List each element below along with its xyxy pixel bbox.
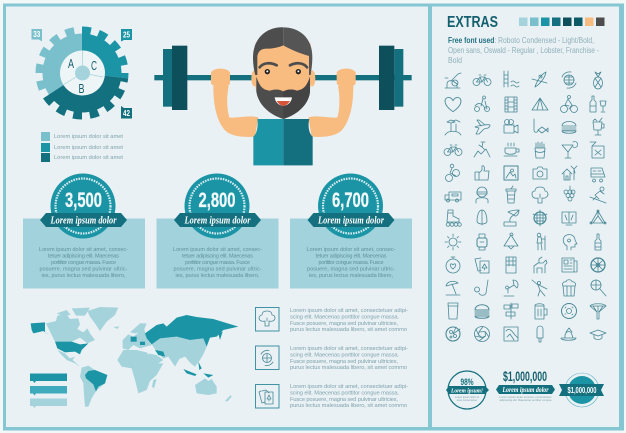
text block: Lorem ipsum dolor sit amet, consectetuer adipi- bbox=[290, 308, 408, 314]
icon: picture bbox=[504, 166, 518, 180]
text block bbox=[290, 308, 408, 333]
stat card 3 bbox=[290, 174, 412, 288]
card background bbox=[290, 218, 412, 288]
gear letters: A bbox=[68, 56, 74, 71]
card background bbox=[23, 218, 145, 288]
icon: thumbs up bbox=[475, 166, 489, 180]
world map bbox=[31, 307, 238, 407]
body text: porttitor congue massa. Fusce bbox=[318, 260, 384, 266]
icon: pizza bbox=[446, 327, 460, 341]
icon: burger bbox=[475, 305, 489, 318]
callout 25 bbox=[121, 29, 132, 42]
icon: globe bbox=[256, 346, 279, 370]
icon: donut bbox=[562, 304, 576, 318]
body text: porttitor congue massa. Fusce bbox=[185, 260, 250, 266]
icon: playing cards bbox=[256, 384, 279, 408]
icon: tree bbox=[532, 187, 548, 203]
body text: Lorem ipsum dolor sit amet, consec- bbox=[39, 247, 128, 253]
bottom badge: 98%: 98% bbox=[460, 377, 474, 388]
icon: fishing bbox=[534, 119, 548, 133]
text block: Lorem ipsum dolor sit amet, consectetuer adipi- bbox=[290, 346, 408, 352]
bottom badge: $1,000,000 seal: $1,000,000 bbox=[568, 386, 597, 395]
weightlifter illustration bbox=[154, 27, 412, 165]
icon: tree bbox=[256, 308, 279, 331]
icon: mountain climber bbox=[474, 142, 490, 157]
hair bbox=[253, 27, 283, 75]
icon: film strip bbox=[505, 97, 517, 112]
icon: person with goggles bbox=[476, 187, 488, 203]
icon: desert island bbox=[445, 120, 461, 135]
font credits: Free font used: Roboto Condensed - Light/Bold, bbox=[448, 36, 594, 45]
callout 33 bbox=[32, 29, 42, 42]
icon: martini bbox=[562, 142, 578, 158]
callout 42 bbox=[121, 106, 132, 118]
bottom badge: $1,000,000 ribbon: Lorem ipsum dolor bbox=[502, 386, 549, 394]
icon: tropical drink bbox=[593, 118, 604, 135]
body text bbox=[39, 247, 128, 279]
icon: gramophone bbox=[504, 210, 519, 226]
gear legend: Lorem ipsum dolor sit amet bbox=[54, 145, 123, 151]
card background bbox=[156, 218, 278, 288]
icon: coffee cup bbox=[504, 143, 519, 156]
ribbon: Lorem ipsum dolor bbox=[50, 216, 117, 226]
icon: head profile bbox=[563, 235, 577, 250]
icon: playing cards bbox=[475, 258, 489, 273]
icon: photo bbox=[504, 327, 518, 341]
icon: caravan truck bbox=[445, 192, 461, 202]
bottom badge: 98%: Lorem ipsum! bbox=[450, 388, 483, 394]
icon: bicycle bbox=[444, 145, 462, 156]
body text: ies, purus lectus malesuada libero, bbox=[176, 273, 260, 279]
map legend bbox=[30, 374, 67, 408]
medal bbox=[184, 174, 250, 238]
body text: porttitor congue massa. Fusce bbox=[51, 260, 116, 266]
bottom badge: $1,000,000 ribbon bbox=[496, 368, 555, 402]
icon: kayak bbox=[532, 72, 547, 87]
icon: pineapple bbox=[594, 72, 602, 89]
arms and hands bbox=[211, 69, 356, 137]
icon: globe with arrows bbox=[562, 72, 576, 88]
eyebrows and eyes bbox=[260, 63, 307, 67]
text block: purus lectus malesuada libero, sit amet commo bbox=[290, 327, 407, 333]
text block bbox=[290, 384, 408, 409]
icon: parasol bbox=[590, 304, 606, 319]
feature row 2 bbox=[256, 346, 408, 371]
callout 25: 25 bbox=[123, 30, 130, 40]
light regions bbox=[46, 307, 232, 407]
font credits bbox=[448, 36, 599, 65]
font credits: Bold bbox=[448, 56, 462, 65]
icon: bottle bbox=[595, 234, 601, 250]
body text: tetuer adipiscing elit. Maecenas bbox=[316, 254, 387, 260]
text block: scing elit. Maecenas porttitor congue massa. bbox=[290, 314, 399, 320]
icon: bicycle bbox=[473, 75, 491, 86]
bottom badge: 98% bbox=[446, 371, 489, 409]
body text: Lorem ipsum dolor sit amet, consec- bbox=[306, 247, 396, 253]
medal bbox=[50, 174, 116, 238]
gear segment A bbox=[36, 27, 82, 98]
callout 42: 42 bbox=[123, 109, 130, 118]
icon: roller skate bbox=[446, 210, 461, 226]
body text bbox=[173, 247, 262, 279]
bottom badge: $1,000,000 seal bbox=[559, 373, 604, 407]
icon: cyclist bbox=[560, 96, 578, 112]
number: 3,500 bbox=[65, 188, 102, 212]
body text: posuere, magna sed pulvinar ultric- bbox=[174, 266, 262, 272]
icon: network globe bbox=[533, 210, 547, 226]
icon: beach umbrella bbox=[446, 281, 460, 295]
icon: camera bbox=[533, 167, 547, 179]
body text: tetuer adipiscing elit. Maecenas bbox=[48, 254, 119, 260]
icon: juicer bbox=[561, 328, 576, 340]
icon: kite surfer bbox=[504, 280, 518, 296]
body text: posuere, magna sed pulvinar ultric- bbox=[307, 266, 395, 272]
gear hub bbox=[60, 50, 105, 96]
icon: camcorder bbox=[504, 120, 518, 133]
gear letters: B bbox=[78, 81, 84, 96]
gear pie chart bbox=[40, 30, 124, 116]
icon: graduation cap bbox=[590, 330, 606, 340]
icon: tent bbox=[532, 98, 548, 110]
highlighted countries bbox=[31, 315, 238, 392]
icon: skier bbox=[590, 187, 606, 203]
icon: wheel bbox=[591, 258, 605, 272]
icon: french fries bbox=[535, 142, 545, 158]
number: 6,700 bbox=[332, 188, 369, 212]
icon: horse rider bbox=[534, 257, 547, 273]
colour swatches bbox=[519, 18, 604, 26]
bottom badge: 98%: Lorem ipsum dolor sit bbox=[455, 396, 479, 399]
icon: tall glass bbox=[448, 303, 458, 319]
icon: swimming pool bbox=[504, 71, 519, 87]
text block: Fusce posuere, magna sed pulvinar ultricies, bbox=[290, 359, 398, 365]
text block bbox=[290, 346, 408, 371]
icon: triangle network bbox=[590, 210, 606, 224]
text block: purus lectus malesuada libero, sit amet commo bbox=[290, 403, 407, 409]
beard bbox=[256, 77, 310, 119]
text block: purus lectus malesuada libero, sit amet commo bbox=[290, 365, 407, 371]
icon: camera aperture bbox=[474, 326, 490, 342]
icon: beer mug bbox=[535, 304, 547, 319]
text block: scing elit. Maecenas porttitor congue massa. bbox=[290, 390, 399, 396]
tank top bbox=[253, 119, 283, 165]
icon: cycling figure bbox=[446, 164, 460, 182]
icon: popcorn bbox=[562, 280, 576, 296]
body text: Lorem ipsum dolor sit amet, consec- bbox=[173, 247, 262, 253]
barbell bbox=[154, 46, 412, 110]
icon: burger bbox=[562, 122, 576, 133]
medal bbox=[318, 174, 383, 238]
icon: smart watch bbox=[477, 234, 487, 250]
font credits: Open sans, Oswald - Regular , Lobster, Franchise - bbox=[448, 46, 599, 55]
icon: takeaway cup bbox=[506, 186, 516, 203]
feature row 1 bbox=[256, 308, 408, 333]
bottom badge: $1,000,000 ribbon: adipiscing elit. Maecenas porttitor congue bbox=[500, 398, 552, 402]
stat card 2 bbox=[156, 174, 278, 288]
callout 33: 33 bbox=[33, 30, 41, 39]
icon: open book bbox=[562, 212, 576, 225]
right panel bbox=[432, 6, 619, 427]
icon: stopwatch with heart bbox=[446, 257, 460, 273]
bottom badge: $1,000,000 ribbon: Lorem ipsum dolor sit amet, consectetuer bbox=[500, 395, 552, 399]
bottom badge: $1,000,000 ribbon: $1,000,000 bbox=[503, 368, 547, 384]
icon: camper van bbox=[591, 168, 605, 182]
gear segment B bbox=[43, 76, 128, 120]
gear letters bbox=[68, 56, 97, 96]
icon: heart bbox=[445, 97, 461, 112]
icon: jerrycan bbox=[590, 142, 604, 158]
feature row 3 bbox=[256, 384, 408, 409]
icon: sun bbox=[445, 234, 461, 250]
icon: avocado bbox=[477, 210, 487, 225]
icon: newspaper bbox=[562, 258, 577, 272]
body text: ies, purus lectus malesuada libero, bbox=[42, 273, 126, 279]
ribbon: Lorem ipsum dolor bbox=[184, 216, 251, 226]
gear letters: C bbox=[91, 58, 97, 73]
extras heading: EXTRAS bbox=[447, 14, 498, 31]
icon: bottle and glass bbox=[590, 96, 606, 112]
number: 2,800 bbox=[198, 188, 236, 212]
gear segment C bbox=[82, 26, 128, 78]
icon: chocolate bar bbox=[506, 257, 516, 273]
icon: popsicle bbox=[537, 326, 543, 342]
gear legend bbox=[41, 132, 123, 162]
icon: grapes bbox=[564, 186, 575, 201]
text block: Fusce posuere, magna sed pulvinar ultricies, bbox=[290, 397, 398, 403]
icon: golf club bbox=[475, 280, 488, 295]
gear legend: Lorem ipsum dolor sit amet bbox=[54, 134, 123, 140]
icon: tennis racket bbox=[591, 280, 606, 296]
text block: scing elit. Maecenas porttitor congue massa. bbox=[290, 352, 399, 358]
icon: scooter rider bbox=[474, 96, 490, 112]
text block: Fusce posuere, magna sed pulvinar ultricies, bbox=[290, 321, 398, 327]
icon: airplane bbox=[475, 120, 490, 134]
body text: ies, purus lectus malesuada libero, bbox=[309, 273, 393, 279]
icon: hiker bbox=[537, 233, 545, 250]
icon: signpost bbox=[504, 303, 518, 319]
gear legend: Lorem ipsum dolor sit amet bbox=[54, 155, 123, 161]
icon: dancer bbox=[532, 280, 547, 296]
ears bbox=[251, 70, 257, 86]
icon grid bbox=[444, 71, 606, 342]
body text bbox=[306, 247, 396, 279]
text block: Lorem ipsum dolor sit amet, consectetuer adipi- bbox=[290, 384, 408, 390]
stat card 1 bbox=[23, 174, 145, 288]
icon: exercise bike bbox=[445, 73, 461, 88]
bottom badge: 98%: amet consectetuer bbox=[457, 399, 477, 402]
body text: posuere, magna sed pulvinar ultric- bbox=[40, 266, 128, 272]
face bbox=[255, 43, 311, 115]
body text: tetuer adipiscing elit. Maecenas bbox=[182, 254, 253, 260]
icon: house with windmill bbox=[562, 166, 577, 180]
left panel bbox=[6, 6, 428, 427]
icon: coat hanger bbox=[504, 233, 518, 249]
mouth bbox=[275, 97, 292, 106]
ribbon: Lorem ipsum dolor bbox=[317, 216, 384, 226]
